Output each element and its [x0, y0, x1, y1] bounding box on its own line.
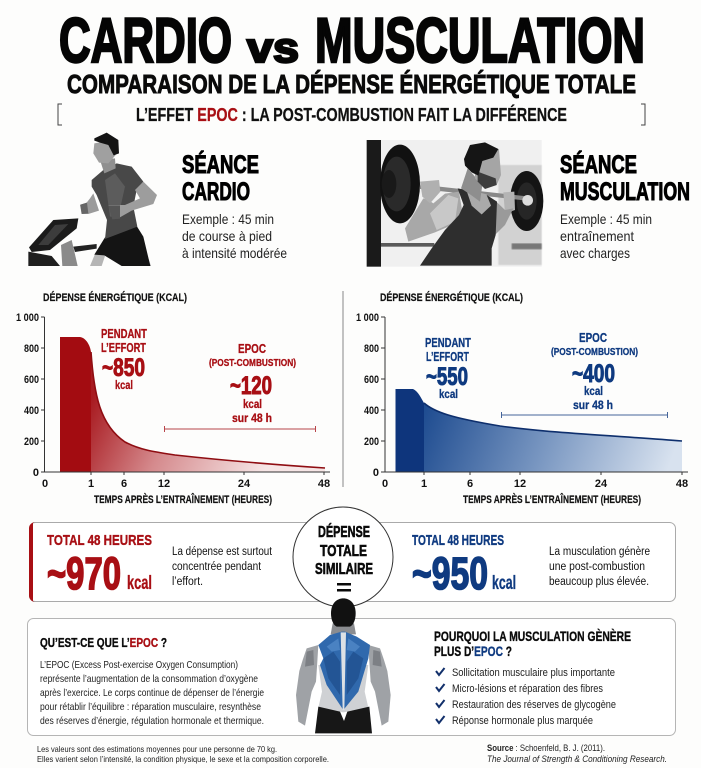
head: [331, 598, 356, 627]
effort callout: L’EFFORT: [426, 349, 469, 364]
musculation note: La musculation génère: [549, 546, 650, 558]
EPOC callout: (POST-COMBUSTION): [551, 347, 638, 358]
runner right arm: [108, 182, 157, 219]
panel: why more EPOC: PLUS D’EPOC ?: [434, 643, 512, 659]
musculation note: une post-combustion: [549, 561, 645, 573]
illustration: back muscles: [296, 598, 391, 733]
chart: musculation energy expenditure: 600: [364, 374, 379, 386]
cardio note: l’effort.: [172, 576, 203, 588]
runner shirt: [92, 163, 143, 239]
face: [475, 149, 501, 188]
bar: [420, 187, 532, 199]
chart: cardio energy expenditure: 6: [121, 478, 127, 490]
session heading: cardio: Exemple : 45 min: [182, 211, 274, 227]
chart: cardio energy expenditure: [16, 291, 330, 506]
chart: musculation energy expenditure: 0: [373, 467, 379, 479]
session heading: musculation: entraînement: [560, 228, 634, 244]
EPOC area: [424, 403, 682, 472]
rack: [367, 140, 381, 267]
arms: [296, 645, 318, 726]
chart: musculation energy expenditure: DÉPENSE ÉNERGÉTIQUE (KCAL): [380, 291, 523, 304]
chart: cardio energy expenditure: 12: [158, 478, 170, 490]
chart: cardio energy expenditure: DÉPENSE ÉNERGÉTIQUE (KCAL): [43, 291, 187, 304]
effort callout: [101, 326, 147, 392]
axes: [381, 317, 688, 475]
neck: [461, 168, 482, 202]
chart: musculation energy expenditure: TEMPS APRÈS L’ENTRAÎNEMENT (HEURES): [463, 493, 641, 506]
chart: cardio energy expenditure: 800: [24, 343, 39, 355]
runner left arm: [80, 193, 99, 214]
EPOC callout: (POST-COMBUSTION): [209, 358, 296, 369]
source: Source : Schoenfeld, B. J. (2011).: [487, 743, 605, 753]
chart: musculation energy expenditure: 800: [364, 343, 379, 355]
EPOC definition: pour rétablir l’équilibre : réparation musculaire, resynthèse: [40, 701, 261, 713]
footnote: [37, 744, 329, 764]
effort callout: L’EFFORT: [101, 340, 146, 355]
panel: why more EPOC: POURQUOI LA MUSCULATION GÈNÈRE: [434, 628, 631, 644]
EPOC callout: [209, 341, 296, 425]
EPOC callout: kcal: [243, 397, 262, 411]
badge: similar total: [293, 507, 393, 607]
chart: musculation energy expenditure: 1 000: [356, 312, 379, 324]
session heading: musculation: SÉANCE: [560, 150, 637, 179]
EPOC callout: EPOC: [238, 341, 266, 356]
checklist: Réponse hormonale plus marquée: [452, 715, 593, 727]
effort callout: [425, 335, 471, 401]
effort callout: kcal: [115, 378, 133, 392]
chart: cardio energy expenditure: 48: [318, 478, 330, 490]
EPOC callout: EPOC: [579, 330, 607, 345]
chart: musculation energy expenditure: 400: [364, 405, 379, 417]
panel: what is EPOC: QU’EST-CE QUE L’EPOC ?: [40, 635, 167, 650]
chart: cardio energy expenditure: 600: [24, 374, 39, 386]
photo: runner on treadmill: [28, 133, 157, 266]
title: CARDIO: [59, 6, 232, 76]
chart: cardio energy expenditure: 200: [24, 436, 39, 448]
session heading: cardio: à intensité modérée: [182, 245, 287, 261]
EPOC definition: L’EPOC (Excess Post-exercise Oxygen Consumption): [40, 659, 238, 671]
photo: lifter with barbell: [367, 140, 543, 267]
chart: cardio energy expenditure: 1 000: [16, 312, 39, 324]
photo backdrop: [367, 140, 542, 267]
effort callout: PENDANT: [425, 335, 471, 350]
divider between charts: [342, 291, 344, 487]
chart: musculation energy expenditure: 1: [421, 478, 427, 490]
runner hair: [94, 133, 119, 155]
torso sides: [318, 665, 368, 712]
EPOC callout: kcal: [584, 384, 603, 398]
effort callout: ~850: [102, 354, 145, 382]
chart: musculation energy expenditure: 24: [595, 478, 608, 490]
runner legs: [90, 254, 106, 266]
footnote: Elles varient selon l’intensité, la condition physique, le sexe et la composition corporelle.: [37, 754, 329, 764]
EPOC callout: sur 48 h: [232, 411, 272, 425]
chart: musculation energy expenditure: [356, 291, 688, 506]
footnote: Les valeurs sont des estimations moyennes pour une personne de 70 kg.: [37, 744, 277, 754]
EPOC area: [91, 352, 325, 472]
chart: cardio energy expenditure: 400: [24, 405, 39, 417]
runner neck and face: [100, 158, 116, 173]
chart: musculation energy expenditure: 0: [382, 478, 388, 490]
left plate: [380, 145, 420, 223]
source: The Journal of Strength & Conditioning Research.: [487, 754, 667, 764]
badge: similar total: TOTALE: [320, 543, 367, 560]
EPOC definition: [40, 659, 264, 727]
chart: cardio energy expenditure: TEMPS APRÈS L’ENTRAÎNEMENT (HEURES): [94, 493, 272, 506]
chest: [464, 188, 491, 214]
panel: why more EPOC: [434, 628, 631, 727]
shorts: [315, 707, 372, 733]
EPOC callout: sur 48 h: [573, 398, 613, 412]
session heading: musculation: Exemple : 45 min: [560, 211, 652, 227]
treadmill console: [29, 218, 78, 252]
EPOC banner: L’EFFET EPOC : LA POST-COMBUSTION FAIT LA DIFFÉRENCE: [136, 104, 567, 125]
effort area: [396, 389, 424, 472]
cardio note: [172, 546, 273, 588]
title: vs: [247, 24, 299, 71]
checklist: Micro-lésions et réparation des fibres: [452, 683, 603, 695]
cardio total: kcal: [127, 573, 152, 594]
right plate: [510, 171, 543, 231]
spine: [341, 632, 346, 710]
EPOC definition: représente l’augmentation de la consommation d’oxygène: [40, 673, 258, 685]
EPOC callout: ~120: [230, 372, 272, 400]
hair: [464, 142, 498, 176]
EPOC definition: après l’exercice. Le corps continue de dépenser de l’énergie: [40, 687, 264, 699]
runner shorts: [94, 226, 150, 266]
session heading: cardio: [182, 150, 287, 261]
session heading: cardio: SÉANCE: [182, 150, 259, 179]
cardio note: concentrée pendant: [172, 561, 262, 573]
badge: similar total: DÉPENSE: [318, 522, 370, 541]
chart: musculation energy expenditure: 12: [514, 478, 526, 490]
chart: musculation energy expenditure: 48: [676, 478, 688, 490]
badge: similar total: SIMILAIRE: [315, 561, 373, 578]
chart: cardio energy expenditure: 0: [42, 478, 48, 490]
session heading: musculation: [560, 150, 690, 261]
musculation total: kcal: [492, 573, 516, 594]
checklist: [436, 667, 616, 727]
chart: cardio energy expenditure: 1: [88, 478, 94, 490]
title: [59, 6, 645, 76]
session heading: cardio: de course à pied: [182, 228, 272, 244]
lifter tank top: [420, 188, 497, 266]
cardio total: TOTAL 48 HEURES: [47, 532, 152, 549]
treadmill base: [28, 252, 60, 266]
chart: cardio energy expenditure: 24: [238, 478, 251, 490]
lifter left arm: [405, 192, 462, 242]
cardio total: ~970: [47, 548, 121, 599]
EPOC definition: des réserves d’énergie, régulation hormonale et thermique.: [40, 715, 264, 727]
lifter hands: [420, 180, 440, 203]
source: [487, 743, 667, 764]
musculation note: beaucoup plus élevée.: [549, 576, 649, 588]
session heading: cardio: CARDIO: [182, 178, 250, 206]
lifter right arm: [494, 201, 513, 236]
chart: musculation energy expenditure: 6: [467, 478, 473, 490]
blue back: [318, 632, 370, 710]
cardio note: La dépense est surtout: [172, 546, 273, 558]
neck and traps: [331, 623, 356, 634]
effort callout: kcal: [439, 387, 458, 401]
chart: cardio energy expenditure: 0: [33, 467, 39, 479]
panel: what is EPOC: [28, 618, 676, 736]
checklist: Sollicitation musculaire plus importante: [452, 667, 615, 679]
effort callout: PENDANT: [101, 326, 147, 341]
musculation note: [549, 546, 650, 588]
chart: musculation energy expenditure: 200: [364, 436, 379, 448]
session heading: musculation: avec charges: [560, 245, 630, 261]
panel: totals: [29, 522, 676, 602]
effort area: [60, 337, 91, 472]
EPOC callout: [551, 330, 638, 412]
musculation total: ~950: [412, 548, 488, 599]
EPOC callout: ~400: [572, 360, 615, 388]
checklist: Restauration des réserves de glycogène: [452, 699, 616, 711]
musculation total: TOTAL 48 HEURES: [412, 532, 504, 549]
effort callout: ~550: [426, 363, 468, 391]
axes: [41, 317, 330, 475]
